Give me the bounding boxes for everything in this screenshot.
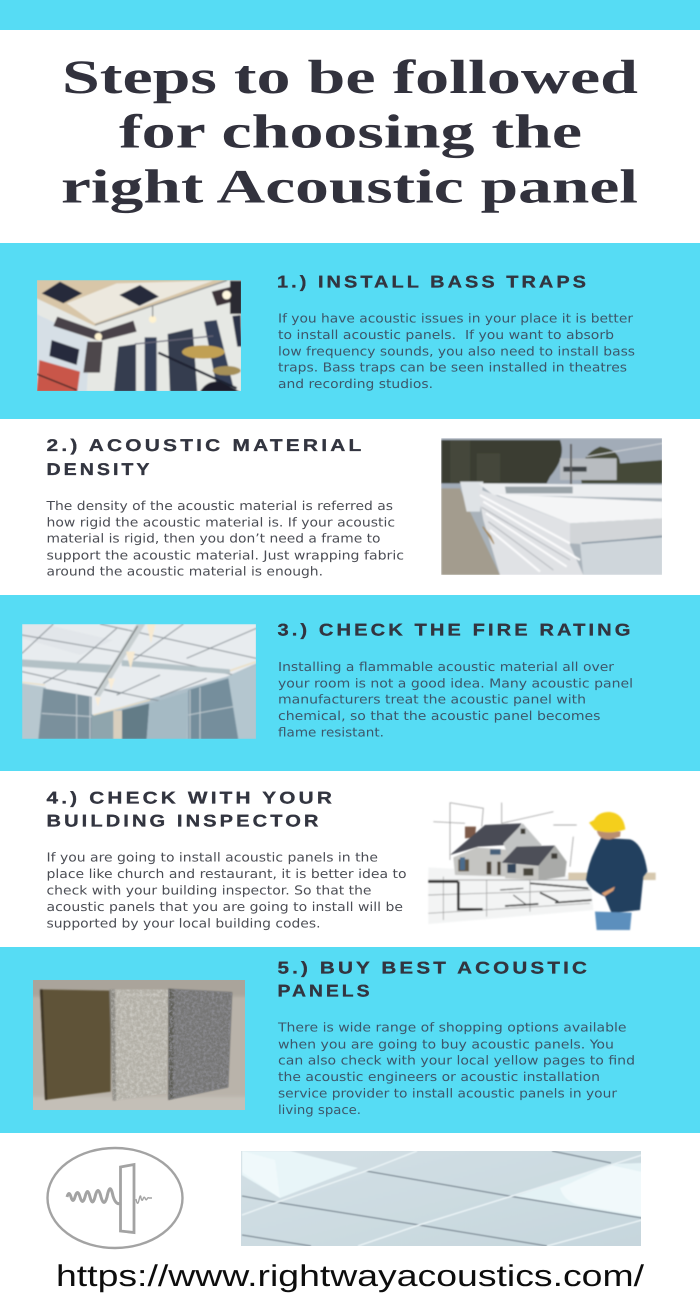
title: right Acoustic panel (61, 160, 638, 214)
text block: If you are going to install acoustic panels in the (46, 850, 378, 865)
text block (45, 498, 404, 579)
text block: and recording studios. (278, 376, 433, 391)
text block: chemical, so that the acoustic panel becomes (278, 708, 600, 723)
website url: https://www.rightwayacoustics.com/ (56, 1260, 645, 1293)
text block: your room is not a good idea. Many acoustic panel (278, 675, 633, 690)
text block: low frequency sounds, you also need to install bass (278, 343, 635, 358)
text block: There is wide range of shopping options available (277, 1020, 626, 1035)
text block: how rigid the acoustic material is. If your acoustic (46, 515, 395, 530)
text block: flame resistant. (278, 724, 384, 739)
text block: living space. (278, 1102, 361, 1117)
text block: If you have acoustic issues in your place it is better (278, 311, 634, 326)
text block: support the acoustic material. Just wrapping fabric (46, 547, 404, 562)
heading (46, 436, 364, 479)
heading: 5.) BUY BEST ACOUSTIC (278, 958, 590, 977)
text block: to install acoustic panels. If you want to absorb (278, 327, 614, 342)
text block: service provider to install acoustic panels in your (278, 1085, 618, 1100)
photo: studio with bass traps (37, 280, 242, 392)
heading: 2.) ACOUSTIC MATERIAL (46, 436, 364, 455)
text block (278, 659, 633, 739)
text block: can also check with your local yellow pages to find (278, 1053, 635, 1068)
photo: stacked acoustic foam (441, 438, 662, 575)
text block: The density of the acoustic material is referred as (45, 498, 393, 513)
heading: DENSITY (46, 460, 152, 479)
photo: three fabric panels (33, 980, 245, 1110)
text block: traps. Bass traps can be seen installed in theatres (278, 360, 627, 375)
top cyan band (0, 0, 700, 30)
text block: Installing a flammable acoustic material all over (278, 659, 615, 674)
text block: check with your building inspector. So that the (46, 883, 372, 898)
text block: when you are going to buy acoustic panels. You (278, 1036, 614, 1051)
icon: sound wave through panel logo (48, 1148, 182, 1248)
heading: 4.) CHECK WITH YOUR (46, 788, 335, 807)
panel: step 4 check with your building inspector (46, 788, 656, 930)
panel: step 1 install bass traps (0, 243, 700, 419)
title (61, 51, 638, 214)
text block: manufacturers treat the acoustic panel with (278, 692, 586, 707)
heading (278, 958, 590, 1001)
text block (46, 850, 406, 930)
text block: around the acoustic material is enough. (46, 564, 323, 579)
text block: material is rigid, then you don’t need a frame to (46, 531, 380, 546)
heading: 1.) INSTALL BASS TRAPS (277, 272, 589, 291)
text block: acoustic panels that you are going to install will be (46, 899, 403, 914)
text block: supported by your local building codes. (46, 915, 320, 930)
photo: office ceiling (22, 624, 256, 739)
title: Steps to be followed (62, 51, 638, 104)
heading: 3.) CHECK THE FIRE RATING (278, 620, 634, 640)
panel: step 5 buy best acoustic panels (0, 947, 700, 1133)
text block (277, 1020, 635, 1117)
heading: PANELS (278, 982, 372, 1001)
photo: house plan and inspector (428, 803, 656, 930)
text block: the acoustic engineers or acoustic installation (278, 1069, 600, 1084)
title: for choosing the (119, 106, 582, 158)
panel: step 2 acoustic material density (45, 436, 662, 579)
text block (278, 311, 635, 391)
text block: place like church and restaurant, it is better idea to (46, 866, 406, 881)
photo: ceiling tiles (241, 1151, 641, 1246)
panel: step 3 check the fire rating (0, 595, 700, 771)
heading (46, 788, 335, 831)
heading: BUILDING INSPECTOR (46, 812, 322, 831)
